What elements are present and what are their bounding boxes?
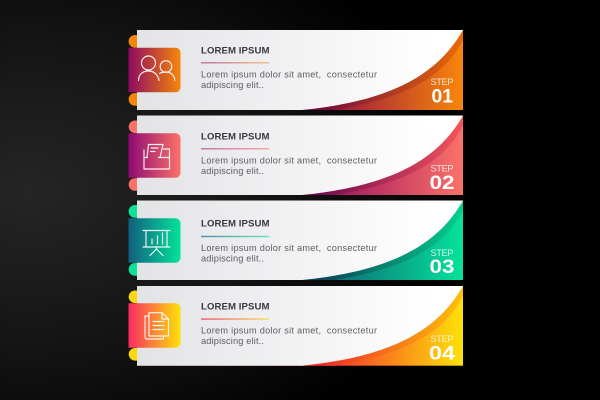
card colour area — [137, 286, 463, 366]
step label: STEP — [430, 247, 454, 258]
step number: 03 — [430, 257, 454, 278]
step label: STEP — [430, 76, 454, 87]
body text: adipiscing elit.. — [201, 254, 264, 264]
divider — [201, 148, 269, 150]
body text: adipiscing elit.. — [201, 166, 264, 176]
step label: STEP — [430, 162, 454, 174]
icon tile — [128, 218, 180, 263]
icon: documents — [145, 313, 168, 339]
icon: presentation board — [143, 230, 170, 256]
heading: LOREM IPSUM — [201, 302, 270, 313]
card curved band — [300, 200, 463, 280]
card colour area — [137, 116, 463, 195]
step label: STEP — [430, 333, 454, 344]
card white area — [137, 286, 463, 366]
divider — [201, 236, 269, 237]
body text: Lorem ipsum dolor sit amet, consectetur — [201, 70, 377, 80]
card colour area — [137, 200, 463, 280]
body text: adipiscing elit.. — [201, 336, 264, 346]
step number: 04 — [429, 344, 456, 364]
step number: 02 — [430, 173, 454, 194]
icon tile — [128, 48, 180, 92]
icon: folder with document — [144, 144, 170, 169]
card curved band — [300, 30, 463, 110]
panel: step 04 — [128, 286, 463, 366]
card white area — [137, 30, 463, 110]
divider — [201, 318, 269, 320]
card curved band — [300, 286, 463, 366]
heading: LOREM IPSUM — [201, 132, 270, 142]
body text: Lorem ipsum dolor sit amet, consectetur — [201, 326, 377, 336]
heading: LOREM IPSUM — [201, 46, 270, 57]
icon tile — [128, 303, 180, 348]
bottom tab nub — [129, 348, 138, 361]
card white area — [137, 116, 463, 195]
top tab nub — [129, 120, 138, 133]
icon tile — [128, 133, 180, 178]
panel: step 03 — [128, 200, 463, 280]
divider — [201, 62, 269, 64]
card white area — [137, 200, 463, 280]
card curved band — [300, 116, 463, 195]
body text: adipiscing elit.. — [201, 80, 264, 90]
icon: people — [138, 56, 175, 80]
top tab nub — [129, 35, 138, 48]
step number: 01 — [432, 86, 453, 108]
heading: LOREM IPSUM — [201, 219, 270, 230]
bottom tab nub — [129, 263, 138, 276]
top tab nub — [129, 205, 138, 218]
top tab nub — [129, 290, 138, 303]
panel: step 01 — [128, 30, 463, 110]
bottom tab nub — [129, 93, 138, 106]
body text: Lorem ipsum dolor sit amet, consectetur — [201, 156, 377, 166]
bottom tab nub — [129, 178, 138, 191]
body text: Lorem ipsum dolor sit amet, consectetur — [201, 243, 377, 253]
panel: step 02 — [128, 116, 463, 195]
card colour area — [137, 30, 463, 110]
